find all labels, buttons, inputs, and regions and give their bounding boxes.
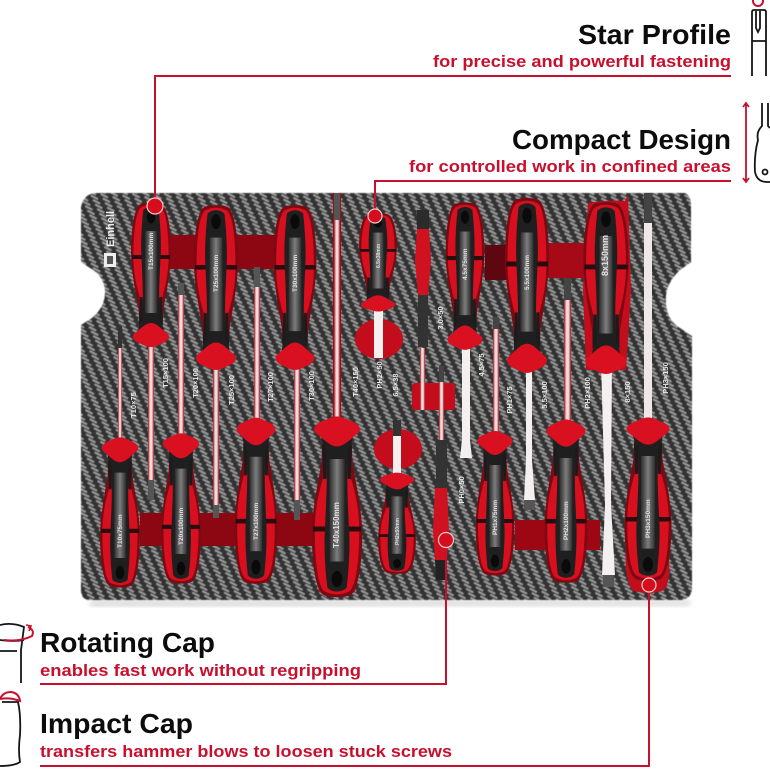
tool shafts xyxy=(118,193,652,587)
subheading: Impact Cap: transfers hammer blows to loosen stuck screws xyxy=(40,742,452,761)
icon: star profile bit xyxy=(752,0,766,76)
tray size labels: 4.5×75 xyxy=(477,353,486,377)
screwdriver: 5.5 x 100: 5.5x100mm xyxy=(524,255,531,290)
icon: impact cap xyxy=(0,692,20,766)
callout line: impact cap xyxy=(40,578,656,766)
tray size labels: 3.0×50 xyxy=(436,306,445,330)
callout line: compact design xyxy=(368,181,731,223)
screwdriver: T10 x 75: T10x75mm xyxy=(117,514,124,548)
screwdriver: T40 x 150 xyxy=(312,416,362,597)
screwdriver: PH0 x 50 precision xyxy=(433,440,449,580)
tray size labels: PH1×75 xyxy=(505,386,514,414)
screwdriver: T25 x 100: T25x100mm xyxy=(213,255,220,292)
screwdriver: T20 x 100: T20x100mm xyxy=(178,508,185,545)
subheading: Rotating Cap: enables fast work without regripping xyxy=(40,661,361,680)
screwdriver: 4.5 x 75: 4.5x75mm xyxy=(462,248,469,280)
screwdriver: 8 x 150: 8x150mm xyxy=(600,235,610,276)
tray size labels: PH0×50 xyxy=(457,476,466,504)
tray shadow xyxy=(90,600,690,607)
heading: Rotating Cap: Rotating Cap xyxy=(40,627,215,658)
screwdriver: T25 x 100 xyxy=(194,205,238,370)
tray size labels: T10×75 xyxy=(129,392,138,418)
icon: rotating cap xyxy=(0,624,33,683)
screwdriver: T10 x 75 xyxy=(100,437,140,588)
tray size labels: 6.5×38 xyxy=(391,373,400,397)
screwdriver: PH2 x 100 xyxy=(545,420,587,583)
screwdriver: T27 x 100 xyxy=(235,418,277,584)
screwdriver: 6.5 x 38 stubby: 6.5x38mm xyxy=(376,243,382,268)
subheading: Compact Design: for controlled work in confined areas xyxy=(409,157,731,176)
screwdriver: T15 x 100 xyxy=(131,202,171,347)
icon: compact design screwdriver with height arrow xyxy=(743,103,770,182)
screwdriver: T40 x 150: T40x150mm xyxy=(332,502,341,548)
tray size labels: T15×100 xyxy=(161,358,170,388)
screwdriver: T27 x 100: T27x100mm xyxy=(253,503,260,540)
screwdriver: T30 x 100 xyxy=(274,205,316,370)
recess: red cavity behind large tools xyxy=(316,195,669,596)
screwdriver: PH2 x 50 stubby: PH2x50mm xyxy=(395,517,401,545)
screwdriver: 8 x 150 xyxy=(583,202,629,374)
screwdriver: 4.5 x 75 xyxy=(446,202,484,350)
screwdriver: 6.5 x 38 stubby xyxy=(359,213,397,312)
recess: upper red bands xyxy=(140,193,600,593)
tray size labels xyxy=(129,306,670,504)
screwdriver: PH2 x 100: PH2x100mm xyxy=(563,501,570,540)
screwdriver: PH3 x 150 xyxy=(624,418,672,581)
callout line: star profile xyxy=(147,76,731,214)
tray size labels: 5.5×100 xyxy=(540,381,549,409)
screwdriver: T30 x 100: T30x100mm xyxy=(292,255,299,292)
screwdriver: 3.0 x 50 precision xyxy=(415,210,431,347)
tray size labels: T40×150 xyxy=(351,367,360,397)
tray size labels: PH2×100 xyxy=(583,377,592,409)
screwdriver: PH1 x 75: PH1x75mm xyxy=(492,500,499,535)
screwdriver: T20 x 100 xyxy=(161,433,201,584)
heading: Impact Cap: Impact Cap xyxy=(40,708,193,739)
screwdriver: 5.5 x 100 xyxy=(505,198,549,373)
callout line: rotating cap xyxy=(40,532,454,684)
tray size labels: 8×150 xyxy=(623,381,632,403)
logo: Einhell xyxy=(104,211,117,267)
tray size labels: T30×100 xyxy=(307,371,316,401)
heading: Star Profile: Star Profile xyxy=(578,19,731,50)
tray size labels: T20×100 xyxy=(191,368,200,398)
screwdriver: PH2 x 50 stubby xyxy=(378,473,416,574)
subheading: Star Profile: for precise and powerful fastening xyxy=(433,52,731,71)
heading: Compact Design: Compact Design xyxy=(512,124,731,155)
screwdriver: PH3 x 150: PH3x150mm xyxy=(645,499,652,538)
tray size labels: T27×100 xyxy=(266,372,275,402)
tray size labels: PH3×150 xyxy=(661,362,670,394)
tray size labels: PH2×50 xyxy=(375,361,384,389)
tray size labels: T25×100 xyxy=(227,375,236,405)
logo: Einhell: Einhell xyxy=(105,211,117,247)
screwdriver: T15 x 100: T15x100mm xyxy=(148,233,155,270)
panel: foam tray xyxy=(81,193,692,600)
screwdriver: PH1 x 75 xyxy=(476,431,514,576)
